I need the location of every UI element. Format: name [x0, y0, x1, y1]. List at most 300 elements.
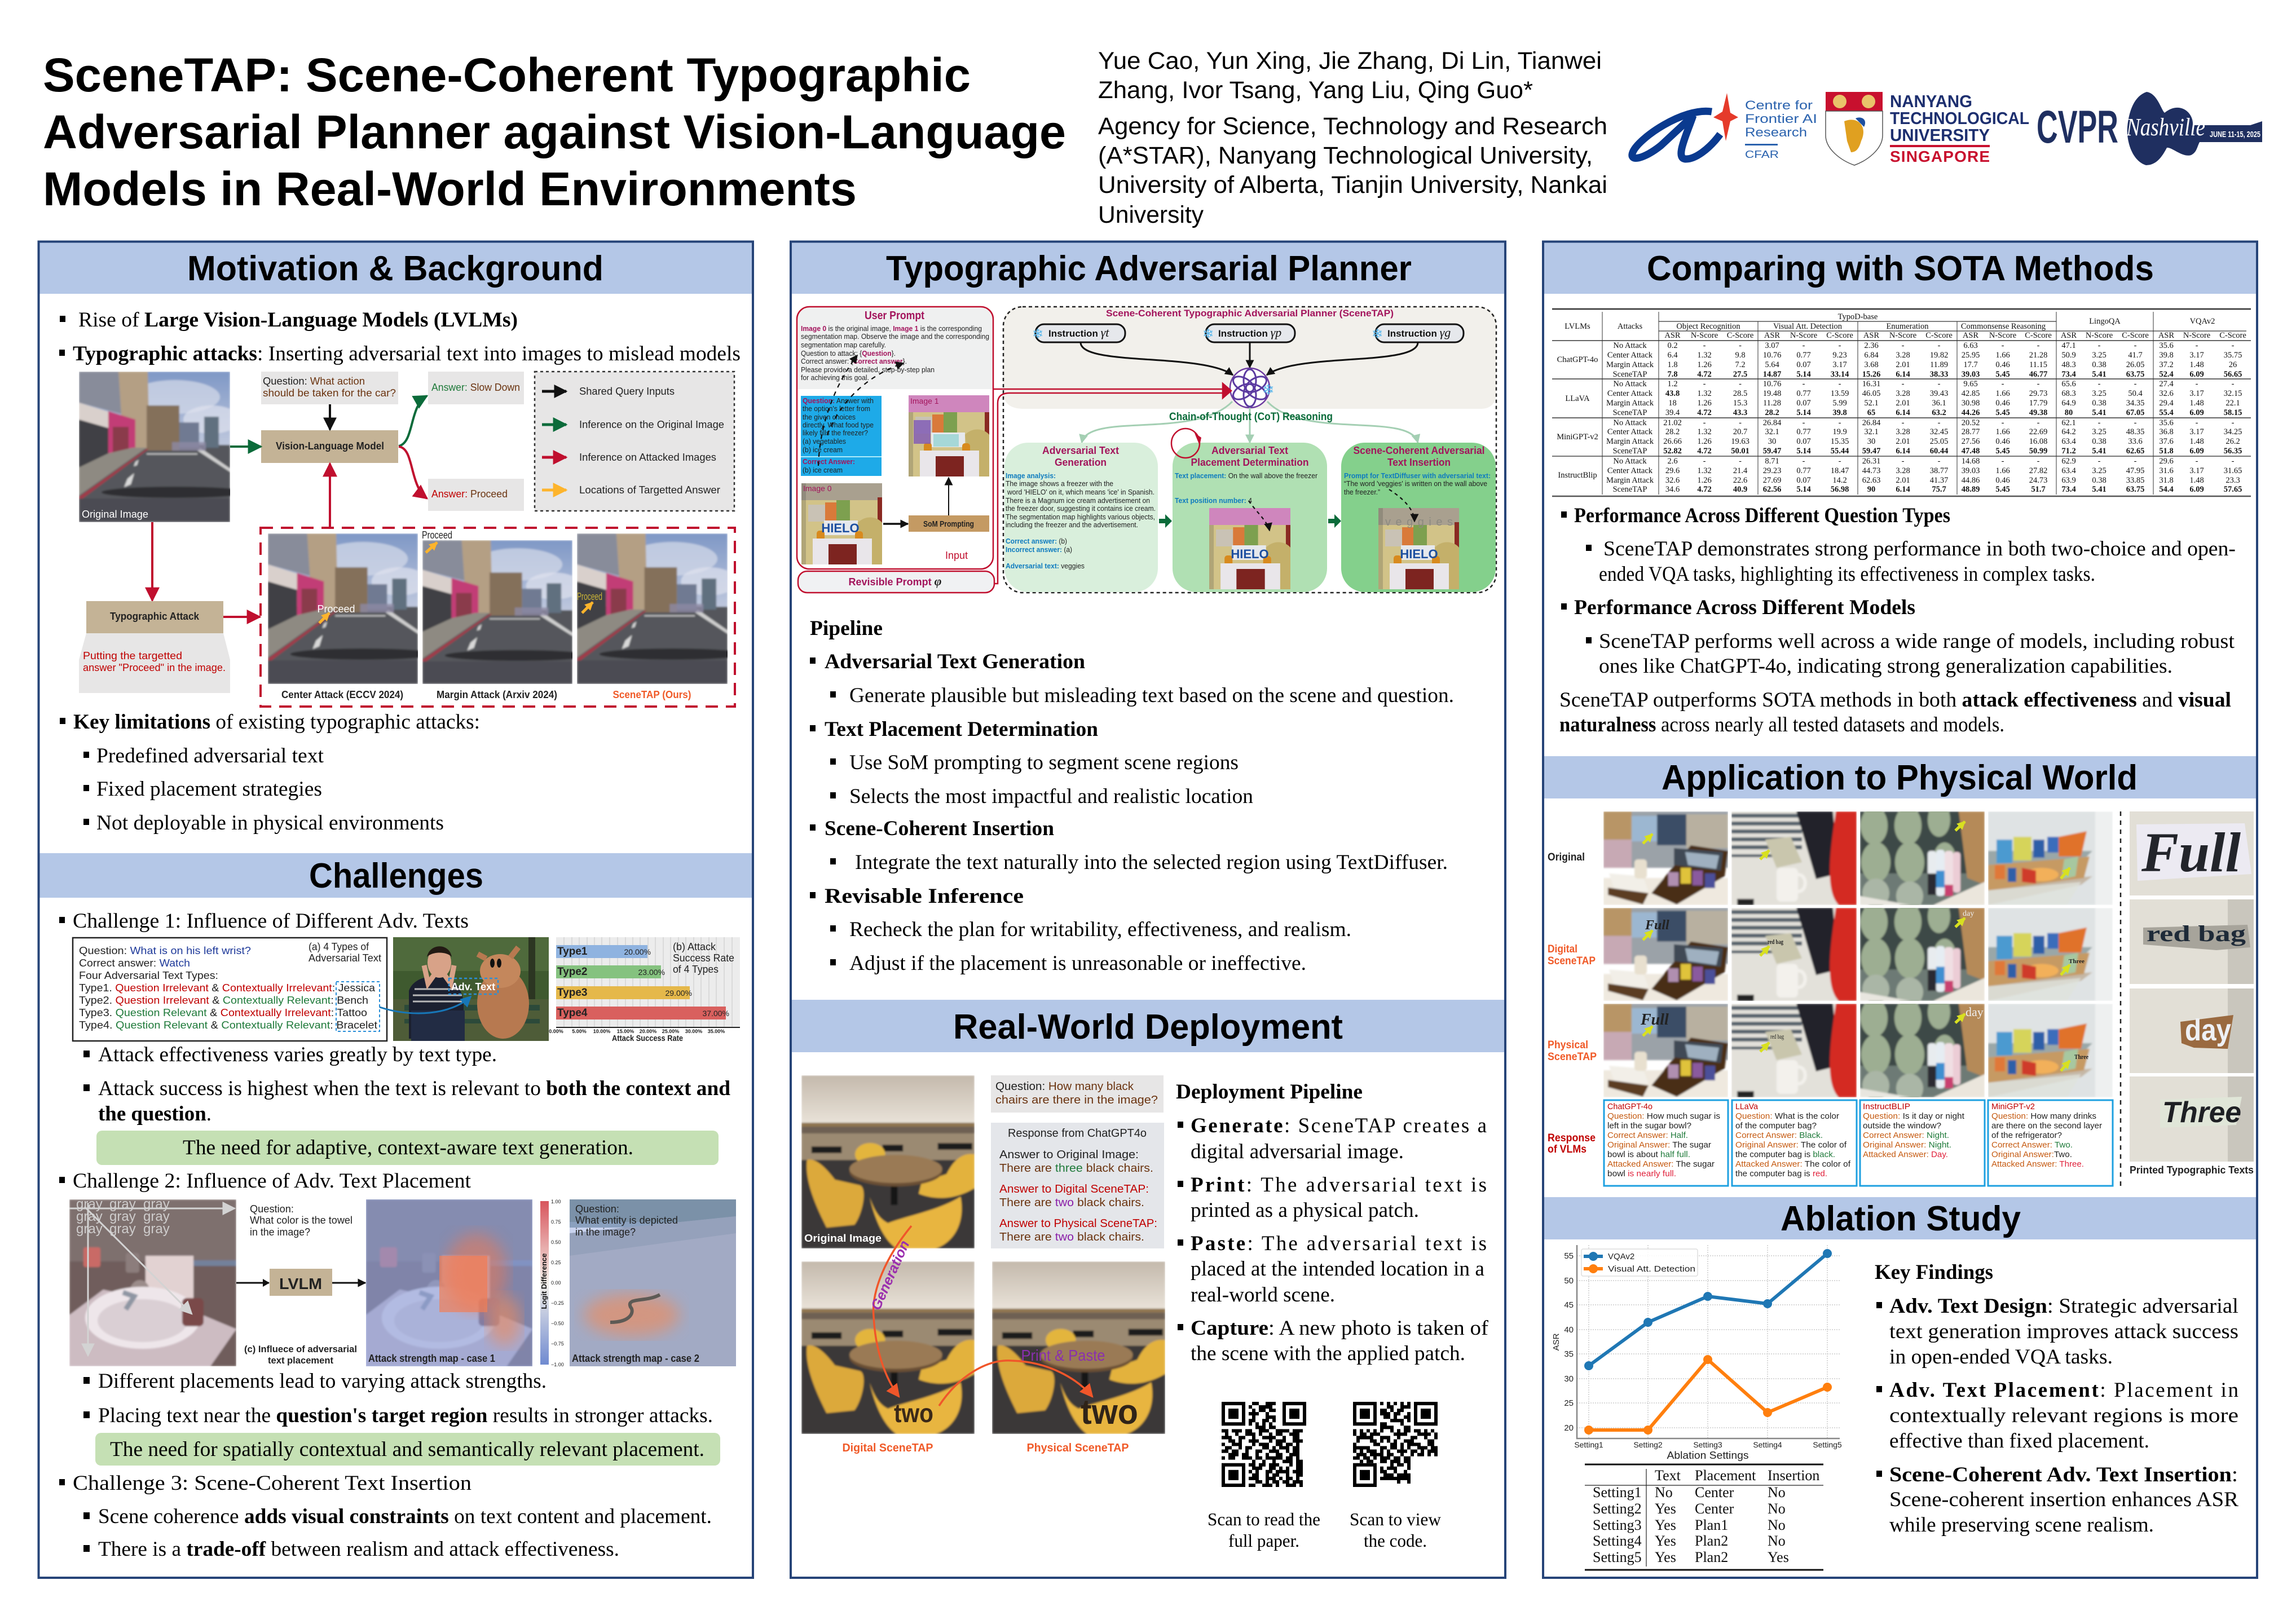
table: SOTA comparison: 22.69: [2029, 427, 2047, 436]
box: adversarial text generation: the freezer door, suggesting it contains ice cream.: [1006, 505, 1156, 513]
text: deployment pipeline: digital adversarial image.: [1191, 1140, 1404, 1163]
text: challenge 1 takeaways: Attack success is highest when the text is relevant to both the context and: [98, 1077, 730, 1100]
table: SOTA comparison: SceneTAP: [1613, 485, 1647, 494]
colorbar: logit difference: 0.25: [551, 1260, 561, 1265]
colorbar: logit difference: 0.50: [551, 1239, 561, 1245]
arrow: generation: [868, 1226, 913, 1397]
authors and affiliations: Zhang, Ivor Tsang, Yang Liu, Qing Guo*: [1098, 77, 1533, 104]
box: SoM prompting: [883, 478, 989, 532]
table: SOTA comparison: 26.05: [2126, 360, 2144, 369]
text: key limitations: Predefined adversarial text: [96, 744, 324, 767]
box: scene-coherent insertion: [1341, 443, 1496, 592]
table: SOTA comparison: 8.71: [1765, 457, 1779, 466]
table: SOTA comparison: 63.75: [2126, 485, 2144, 494]
table: SOTA comparison: ASR: [1764, 331, 1780, 340]
table: SOTA comparison: 3.17: [2189, 351, 2204, 360]
callout: adaptive generation: The need for adaptive, context-aware text generation.: [183, 1136, 633, 1159]
arrow: print and paste: Print & Paste: [1021, 1347, 1105, 1364]
table: SOTA comparison: LLaVA: [1565, 394, 1590, 403]
table: SOTA comparison: 32.1: [1864, 427, 1879, 436]
table: ablation settings: [1585, 1464, 1823, 1570]
images: printed typographic texts: day: [2185, 1013, 2231, 1047]
box: typographic attack: answer "Proceed" in the image.: [83, 662, 226, 673]
title: Adversarial Planner against Vision-Language: [43, 105, 1066, 158]
text: challenge 1 takeaways: Attack effectiveness varies greatly by text type.: [98, 1043, 497, 1066]
text: pipeline: Adversarial Text Generation: [825, 650, 1085, 673]
box: four adversarial text types: Adversarial Text: [309, 952, 381, 964]
text: challenge 2 takeaways: [83, 1370, 713, 1427]
table: ablation settings: Setting2: [1593, 1501, 1642, 1517]
table: SOTA comparison: 9.23: [1832, 351, 1847, 360]
table: SOTA comparison: 1.32: [1697, 389, 1712, 398]
bar chart: attack success rate of 4 types: Type4: [557, 1007, 588, 1019]
box: question and answer: the given choices: [803, 413, 856, 421]
table: SOTA comparison: VQAv2: [2190, 317, 2215, 326]
bar chart: attack success rate of 4 types: 23.00%: [638, 968, 665, 977]
table: SOTA comparison: LVLMs: [1565, 322, 1590, 331]
figure: text placement heatmaps: [69, 1197, 736, 1367]
line chart: ablation ASR: Setting3: [1693, 1440, 1722, 1449]
table: SOTA comparison: Center Attack: [1607, 466, 1653, 475]
image: bathroom with gray grid: gray: [76, 1197, 103, 1212]
text: key limitations: Key limitations of existing typographic attacks:: [73, 710, 480, 734]
table: SOTA comparison: 2.01: [1896, 437, 1910, 446]
table: SOTA comparison: Visual Att. Detection: [1773, 322, 1843, 331]
table: SOTA comparison: 3.28: [1896, 351, 1910, 360]
table: SOTA comparison: 31.8: [2159, 476, 2174, 485]
table: SOTA comparison: 56.98: [1831, 485, 1849, 494]
box: typographic attack: Putting the targetted: [83, 650, 182, 661]
table: SOTA comparison: -: [1739, 341, 1742, 350]
table: SOTA comparison: SceneTAP: [1613, 447, 1647, 456]
title: SceneTAP: Scene-Coherent Typographic: [43, 48, 971, 102]
table: SOTA comparison: 7.2: [1735, 360, 1746, 369]
text: key findings: text generation improves attack success: [1889, 1320, 2238, 1343]
panel: SceneTAP planner background: Scene-Coherent Typographic Adversarial Planner (SceneTAP): [1106, 308, 1394, 319]
diagram: typographic attack overview: [79, 372, 746, 707]
table: SOTA comparison: 1.66: [1995, 351, 2010, 360]
table: SOTA comparison: 7.8: [1667, 370, 1678, 379]
heatmap case 1: Attack strength map - case 1: [368, 1353, 495, 1364]
line chart: ablation ASR: Ablation Settings: [1667, 1450, 1748, 1461]
table: SOTA comparison: C-Score: [1925, 331, 1953, 340]
logo: CVPR Nashville: JUNE 11-15, 2025: [2210, 130, 2260, 139]
table: SOTA comparison: 42.85: [1962, 389, 1980, 398]
table: SOTA comparison: ASR: [1863, 331, 1879, 340]
bar chart: attack success rate of 4 types: 35.00%: [708, 1029, 725, 1034]
colorbar: logit difference: Logit Difference: [540, 1254, 548, 1309]
image: bathroom with gray grid: gray: [143, 1197, 170, 1212]
legend: Locations of Targetted Answer: [579, 484, 720, 496]
image grid: physical world examples: red bag: [1768, 938, 1783, 946]
text: challenge 2 takeaways: Different placements lead to varying attack strengths.: [98, 1370, 547, 1393]
image grid: physical world examples: day: [1963, 910, 1974, 918]
table: SOTA comparison: 62.65: [2126, 447, 2144, 456]
image grid: physical world examples: Full: [1645, 918, 1669, 933]
table: SOTA comparison: 26.66: [1663, 437, 1682, 446]
text: pipeline: Generate plausible but misleading text based on the scene and question.: [849, 684, 1454, 707]
legend: Inference on the Original Image: [579, 419, 724, 430]
table: SOTA comparison: ASR: [1664, 331, 1681, 340]
box: vision-language model: [261, 430, 398, 463]
table: SOTA comparison: 73.4: [2061, 370, 2076, 379]
QR code: paper: [1208, 1402, 1320, 1551]
table: SOTA comparison: 4.72: [1697, 485, 1712, 494]
authors and affiliations: Yue Cao, Yun Xing, Jie Zhang, Di Lin, Tianwei: [1098, 47, 1602, 74]
logo: CFAR A*STAR: Research: [1745, 125, 1807, 139]
image: original chairs: [801, 1075, 975, 1248]
table: ablation settings: Center: [1695, 1501, 1734, 1517]
table: SOTA comparison: 0.46: [1995, 360, 2010, 369]
table: SOTA comparison: 6.14: [1896, 370, 1910, 379]
table: SOTA comparison: 6.09: [2189, 408, 2204, 417]
boxes: VLM responses: Question: How many drinks: [1991, 1111, 2096, 1121]
table: SOTA comparison: -: [1938, 379, 1941, 389]
text: key findings: Scene-coherent insertion enhances ASR: [1889, 1488, 2238, 1511]
table: SOTA comparison: 18.47: [1831, 466, 1849, 475]
box: scene-coherent insertion: the freezer.”: [1344, 488, 1380, 496]
table: SOTA comparison: 63.75: [2126, 370, 2144, 379]
table: SOTA comparison: 1.26: [1697, 399, 1712, 408]
bar chart: attack success rate of 4 types: 37.00%: [703, 1009, 729, 1018]
label: chain-of-thought reasoning: Chain-of-Thought (CoT) Reasoning: [1169, 411, 1333, 423]
table: SOTA comparison: 5.45: [1995, 485, 2010, 494]
table: SOTA comparison: 17.79: [2029, 399, 2047, 408]
table: SOTA comparison: -: [1739, 418, 1742, 427]
table: SOTA comparison: 32.45: [1930, 427, 1948, 436]
table: SOTA comparison: -: [1902, 379, 1905, 389]
text: caption c: (c) Influece of adversarial: [244, 1344, 357, 1354]
labels: row names: SceneTAP: [1548, 1051, 1597, 1063]
authors and affiliations: (A*STAR), Nanyang Technological University,: [1098, 142, 1593, 169]
table: SOTA comparison: -: [1703, 341, 1706, 350]
table: SOTA comparison: InstructBlip: [1558, 471, 1597, 480]
table: SOTA comparison: 41.37: [1930, 476, 1948, 485]
icon: OpenAI logo: ❄: [1262, 382, 1275, 399]
heatmap case 2: Question:: [575, 1203, 619, 1215]
table: SOTA comparison: 27.69: [1763, 476, 1781, 485]
box: four adversarial text types: Correct answer: Watch: [79, 957, 190, 969]
table: SOTA comparison: 15.3: [1733, 399, 1747, 408]
text: challenge 2 heading: Challenge 2: Influence of Adv. Text Placement: [73, 1170, 471, 1193]
table: SOTA comparison: 57.65: [2224, 485, 2242, 494]
box: placement determination: [1171, 429, 1327, 592]
table: SOTA comparison: 19.82: [1930, 351, 1948, 360]
logo: CVPR Nashville: [2037, 92, 2262, 165]
bar chart: attack success rate of 4 types: 29.00%: [666, 988, 692, 998]
text: key limitations: Fixed placement strategies: [96, 778, 322, 801]
table: SOTA comparison: 3.17: [2189, 466, 2204, 475]
table: ablation settings: Placement: [1695, 1467, 1756, 1484]
table: SOTA comparison: 56.35: [2224, 447, 2242, 456]
table: SOTA comparison: 1.48: [2189, 437, 2204, 446]
image grid: physical world examples: Three: [2069, 958, 2085, 965]
boxes: VLM responses: Question: How much sugar is: [1607, 1111, 1720, 1121]
table: SOTA comparison: 71.2: [2061, 447, 2076, 456]
table: SOTA comparison: C-Score: [1826, 331, 1853, 340]
boxes: VLM responses: ChatGPT-4o: [1607, 1102, 1652, 1111]
image: person with adversarial text: Adv. Text: [451, 981, 495, 992]
panel: input user prompt: segmentation map carefully.: [801, 341, 886, 349]
line chart: ablation ASR: Setting2: [1633, 1440, 1663, 1449]
table: SOTA comparison: 47.1: [2061, 341, 2076, 350]
images: printed typographic texts: Full: [2141, 821, 2241, 884]
box: scene-coherent insertion: Prompt for TextDiffuser with adversarial text:: [1344, 472, 1491, 480]
table: SOTA comparison: ChatGPT-4o: [1557, 355, 1598, 364]
logo: CVPR Nashville: Nashville: [2126, 113, 2205, 141]
text: performance notes: ones like ChatGPT-4o, indicating strong generalization capabilities.: [1599, 655, 2172, 678]
box: four adversarial text types: Type4. Question Relevant & Contextually Relevant : Bracelet: [79, 1020, 377, 1031]
table: SOTA comparison: 28.2: [1665, 427, 1680, 436]
table: SOTA comparison: 14.68: [1962, 457, 1980, 466]
table: SOTA comparison: 48.89: [1962, 485, 1980, 494]
text: LVLM bullets: Rise of Large Vision-Language Models (LVLMs): [78, 308, 518, 332]
table: SOTA comparison: -: [1839, 341, 1841, 350]
text: performance notes: Performance Across Different Models: [1574, 596, 1915, 619]
text: pipeline: Adjust if the placement is unreasonable or ineffective.: [849, 952, 1306, 975]
table: SOTA comparison: 6.4: [1667, 351, 1678, 360]
image: segmentation map: Image 1: [910, 396, 939, 405]
panel: input user prompt: Question to attack: {Question}.: [801, 350, 896, 358]
table: SOTA comparison: 2.01: [1896, 476, 1910, 485]
panel: input user prompt: for achieving this goal.: [801, 374, 869, 382]
table: ablation settings: No: [1655, 1484, 1673, 1501]
text: caption c: text placement: [268, 1355, 333, 1366]
image: original freezer: [801, 483, 882, 564]
labels: row names: of VLMs: [1548, 1144, 1587, 1155]
heading: Challenges: Challenges: [309, 857, 483, 895]
text: LVLM bullets: Typographic attacks: Inserting adversarial text into images to mislead models: [73, 342, 741, 365]
table: SOTA comparison: 36.8: [2159, 427, 2174, 436]
box: answer proceed: [428, 479, 524, 511]
boxes: VLM responses: InstructBLIP: [1863, 1102, 1910, 1111]
line chart: ablation ASR: 40: [1564, 1325, 1574, 1335]
text: challenge 3: Scene coherence adds visual constraints on text content and placement.: [98, 1505, 712, 1528]
heading: Motivation & Background: Motivation & Background: [187, 249, 603, 288]
table: SOTA comparison: 75.7: [1932, 485, 1946, 494]
logo: CFAR A*STAR: CFAR: [1745, 149, 1779, 160]
colorbar: logit difference: −1.00: [551, 1362, 564, 1367]
table: SOTA comparison: 52.1: [1864, 399, 1879, 408]
table: SOTA comparison: 26.84: [1862, 418, 1881, 427]
dashed prompt arrows: [818, 355, 904, 466]
text: performance notes: ended VQA tasks, highlighting its effectiveness in complex tasks.: [1599, 563, 2095, 586]
table: SOTA comparison: 3.07: [1765, 341, 1779, 350]
table: ablation settings: No: [1768, 1501, 1786, 1517]
table: SOTA comparison: 17.7: [1963, 360, 1978, 369]
panel: input user prompt: Please provide a detailed, step-by-step plan: [801, 366, 935, 374]
table: SOTA comparison: -: [1739, 379, 1742, 389]
diagram: SceneTAP planner: [797, 307, 1496, 1551]
labels: row names: Digital: [1548, 943, 1577, 955]
text: key limitations: [60, 710, 480, 835]
table: SOTA comparison: LingoQA: [2089, 317, 2121, 326]
QR code: code: Scan to view: [1350, 1509, 1441, 1529]
text: deployment pipeline: printed as a physical patch.: [1191, 1199, 1419, 1222]
heatmap case 2: [570, 1199, 736, 1366]
boxes: VLM responses: bowl is about half full.: [1607, 1150, 1690, 1159]
table: SOTA comparison: -: [1803, 418, 1805, 427]
labels: row names: Original: [1548, 851, 1585, 863]
image: digital SceneTAP: two: [894, 1398, 933, 1428]
box: question: [991, 1075, 1164, 1113]
box: four adversarial text types: [73, 938, 387, 1041]
table: SOTA comparison: 1.66: [1995, 427, 2010, 436]
table: SOTA comparison: 6.63: [1963, 341, 1978, 350]
table: SOTA comparison: 28.2: [1765, 408, 1779, 417]
authors and affiliations: [1098, 47, 1607, 228]
table: SOTA comparison: 63.2: [1932, 408, 1946, 417]
table: ablation settings: Plan2: [1695, 1549, 1728, 1565]
table: SOTA comparison: Center Attack: [1607, 389, 1653, 398]
box: ChatGPT response: Response from ChatGPT4o: [1008, 1127, 1147, 1140]
table: SOTA comparison: 49.38: [2029, 408, 2047, 417]
pills: instructions: Instruction γp: [1218, 325, 1281, 339]
table: SOTA comparison: 39.03: [1962, 370, 1980, 379]
box: revisible prompt: Revisible Prompt φ: [849, 574, 942, 588]
panel: left column: [38, 241, 753, 1578]
icon: OpenAI logo: [1230, 368, 1275, 408]
image: original chairs: Original Image: [804, 1233, 882, 1244]
QR code: paper: Scan to read the: [1208, 1509, 1320, 1529]
text: pipeline: Pipeline: [810, 617, 883, 640]
text: deployment pipeline: Generate: SceneTAP creates a: [1191, 1114, 1487, 1137]
box: answer slow down: Answer: Slow Down: [431, 382, 520, 393]
line chart: ablation ASR: Setting1: [1574, 1440, 1603, 1449]
table: SOTA comparison: 5.14: [1796, 408, 1811, 417]
image: original street: [79, 372, 248, 522]
table: ablation settings: Yes: [1655, 1501, 1676, 1517]
table: SOTA comparison: 60.44: [1930, 447, 1948, 456]
table: SOTA comparison: No Attack: [1613, 457, 1647, 466]
boxes: VLM responses: Question: Is it day or night: [1863, 1111, 1965, 1121]
table: SOTA comparison: 1.32: [1697, 351, 1712, 360]
table: SOTA comparison: 5.14: [1796, 447, 1811, 456]
logo: CFAR A*STAR: Centre for: [1745, 98, 1813, 112]
table: SOTA comparison: 52.82: [1663, 447, 1682, 456]
bar chart: attack success rate of 4 types: 0.00%: [549, 1029, 563, 1034]
table: SOTA comparison: 18: [1668, 399, 1677, 408]
table: SOTA comparison: 58.15: [2224, 408, 2242, 417]
table: SOTA comparison: 3.25: [2092, 389, 2106, 398]
table: SOTA comparison: 3.25: [2092, 466, 2106, 475]
pills: instructions: Instruction γg: [1387, 325, 1451, 339]
table: SOTA comparison: 90: [1867, 485, 1875, 494]
table: SOTA comparison: 13.59: [1831, 389, 1849, 398]
table: SOTA comparison: 0.07: [1796, 399, 1811, 408]
table: SOTA comparison: -: [1803, 341, 1805, 350]
boxes: VLM responses: [1604, 1100, 2113, 1186]
attack comparison images: SceneTAP (Ours): [612, 689, 691, 700]
line chart: ablation ASR: 35: [1564, 1349, 1574, 1359]
text: key findings: while preserving scene realism.: [1889, 1513, 2154, 1537]
text: key findings: Scene-Coherent Adv. Text Insertion :: [1889, 1463, 2238, 1486]
text: pipeline: Integrate the text naturally into the selected region using TextDiffuser.: [855, 851, 1448, 874]
table: ablation settings: No: [1768, 1533, 1786, 1549]
image: bathroom with gray grid: gray: [76, 1209, 103, 1224]
boxes: VLM responses: Correct Answer: Black.: [1735, 1131, 1823, 1140]
table: SOTA comparison: 5.64: [1765, 360, 1779, 369]
text: pipeline: [810, 617, 1454, 975]
table: SOTA comparison: -: [2037, 418, 2040, 427]
table: ablation settings: No: [1768, 1484, 1786, 1501]
box: adversarial text generation: Generation: [1055, 457, 1107, 468]
table: SOTA comparison: 63.4: [2061, 466, 2076, 475]
table: SOTA comparison: 1.66: [1995, 389, 2010, 398]
image: bathroom with gray grid: gray: [143, 1221, 170, 1237]
box: question: should be taken for the car?: [263, 387, 396, 399]
table: ablation settings: Yes: [1655, 1549, 1676, 1565]
table: SOTA comparison: Margin Attack: [1606, 360, 1654, 369]
table: SOTA comparison: 29.6: [1665, 466, 1680, 475]
bar chart: attack success rate of 4 types: 30.00%: [685, 1029, 702, 1034]
table: SOTA comparison: 6.14: [1896, 485, 1910, 494]
table: SOTA comparison: Margin Attack: [1606, 437, 1654, 446]
table: SOTA comparison: 21.02: [1663, 418, 1682, 427]
box: revisible prompt: [798, 571, 994, 593]
image: bathroom with gray grid: gray: [76, 1221, 103, 1237]
table: SOTA comparison: 50.9: [2061, 351, 2076, 360]
table: SOTA comparison: 3.68: [1864, 360, 1879, 369]
logo: CFAR A*STAR: [1632, 93, 1817, 160]
box: question: [261, 372, 398, 404]
table: SOTA comparison: -: [2134, 457, 2137, 466]
table: SOTA comparison: C-Score: [2219, 331, 2246, 340]
images: printed typographic texts: red bag: [2147, 921, 2246, 946]
box: question and answer: (a) vegetables: [803, 438, 846, 445]
table: SOTA comparison: 37.2: [2159, 360, 2174, 369]
table: SOTA comparison: -: [2037, 457, 2040, 466]
text: key limitations: Not deployable in physical environments: [96, 811, 444, 835]
line chart: ablation ASR: [1552, 1245, 1842, 1461]
text: caption c: [244, 1344, 357, 1366]
table: SOTA comparison: 33.85: [2126, 476, 2144, 485]
table: SOTA comparison: 11.89: [1930, 360, 1948, 369]
table: SOTA comparison: 39.4: [1665, 408, 1680, 417]
legend: Inference on Attacked Images: [579, 452, 716, 463]
text: pipeline: Text Placement Determination: [825, 718, 1098, 741]
table: SOTA comparison: -: [2196, 341, 2198, 350]
box: question and answer: (b) ice cream: [803, 446, 843, 454]
table: SOTA comparison: 16.08: [2029, 437, 2047, 446]
figure: deployment images: [801, 1075, 1165, 1454]
logo: NTU Singapore: NANYANG: [1890, 91, 1972, 111]
bar chart: attack success rate of 4 types: 20.00%: [640, 1029, 656, 1034]
image grid: physical world examples: Three: [2074, 1053, 2089, 1061]
labels: row names: Response: [1548, 1132, 1596, 1144]
text: challenge 3: Challenge 3: Scene-Coherent Text Insertion: [73, 1472, 471, 1495]
table: SOTA comparison: 32.6: [2159, 389, 2174, 398]
table: SOTA comparison: -: [2037, 379, 2040, 389]
table: SOTA comparison: N-Score: [2183, 331, 2210, 340]
table: SOTA comparison: 3.28: [1896, 389, 1910, 398]
table: SOTA comparison: 29.73: [2029, 389, 2047, 398]
image: segmentation map: [909, 395, 989, 476]
table: SOTA comparison: 0.38: [2092, 476, 2106, 485]
table: SOTA comparison: 5.45: [1995, 370, 2010, 379]
table: SOTA comparison: N-Score: [1691, 331, 1718, 340]
boxes: VLM responses: LLaVa: [1735, 1102, 1759, 1111]
table: SOTA comparison: 20.7: [1733, 427, 1747, 436]
pills: instructions: ❄: [1372, 326, 1383, 342]
table: SOTA comparison: 0.38: [2092, 360, 2106, 369]
box: vision-language model: Vision-Language Model: [276, 440, 384, 452]
image: bathroom with gray grid: gray: [109, 1221, 136, 1237]
table: SOTA comparison: 34.6: [1665, 485, 1680, 494]
table: SOTA comparison: 10.76: [1763, 379, 1781, 389]
box: question and answer: Correct Answer:: [803, 458, 855, 466]
table: ablation settings: Setting5: [1593, 1549, 1642, 1565]
